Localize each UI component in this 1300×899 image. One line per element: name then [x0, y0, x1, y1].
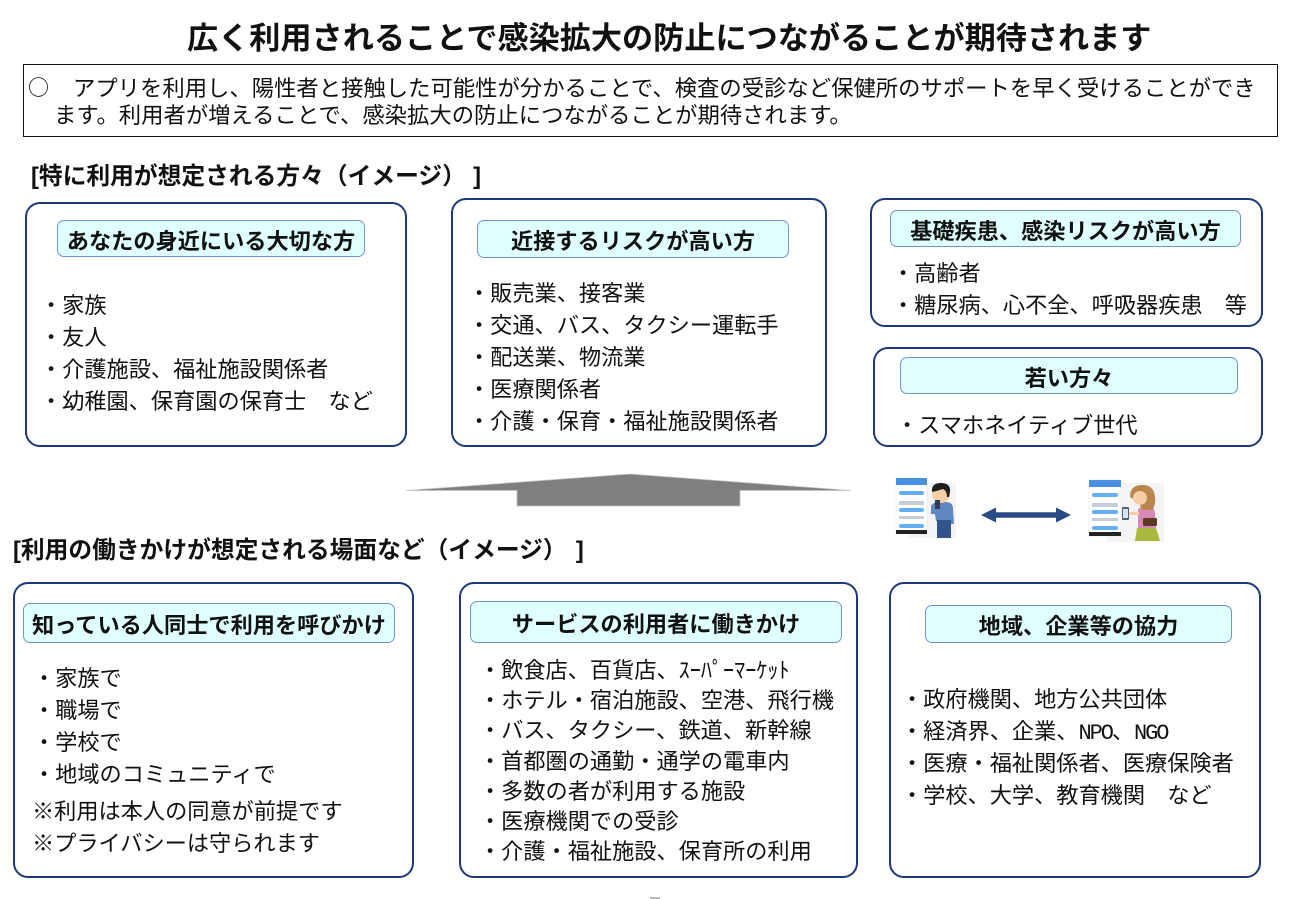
panel heading: 知っている人同士で利用を呼びかけ	[32, 613, 386, 638]
intro bullet: ○	[28, 72, 49, 102]
panel list: ・地域のコミュニティで	[33, 762, 276, 787]
panel heading: 近接するリスクが高い方	[511, 229, 755, 254]
panel list: ・高齢者	[892, 261, 981, 286]
panel list: ・ホテル・宿泊施設、空港、飛行機	[479, 688, 834, 713]
panel list: ・医療関係者	[468, 377, 601, 402]
panel list: ・販売業、接客業	[468, 281, 646, 306]
title: 広く利用されることで感染拡大の防止につながることが期待されます	[187, 21, 1151, 56]
panel list: ・医療・福祉関係者、医療保険者	[901, 751, 1234, 776]
panel: among acquaintances	[13, 582, 414, 878]
panel heading	[57, 220, 365, 257]
panel list: ・医療機関での受診	[479, 809, 679, 834]
panel notes	[32, 799, 343, 856]
panel heading	[477, 220, 789, 258]
arrow: upward wide arrow	[406, 474, 851, 506]
panel: young people	[873, 347, 1263, 447]
panel heading: 基礎疾患、感染リスクが高い方	[910, 218, 1221, 244]
panel list	[33, 666, 276, 787]
panel list: ・介護施設、福祉施設関係者	[40, 357, 328, 382]
icon: man with smartphone	[896, 478, 956, 538]
intro line 2: ます。利用者が増えることで、感染拡大の防止につながることが期待されます。	[54, 103, 852, 128]
panel notes: ※プライバシーは守られます	[32, 831, 320, 856]
panel list: ・介護・福祉施設、保育所の利用	[479, 839, 812, 864]
panel list: ・学校で	[33, 730, 122, 755]
panel list: ・首都圏の通勤・通学の電車内	[479, 749, 790, 774]
icon: double-headed arrow	[981, 508, 1071, 522]
panel notes: ※利用は本人の同意が前提です	[32, 799, 343, 824]
panel heading	[900, 357, 1238, 394]
section heading: expected users: [特に利用が想定される方々（イメージ） ]	[31, 163, 481, 190]
panel list: ・交通、バス、タクシー運転手	[468, 313, 779, 338]
panel list	[468, 281, 779, 434]
panel list	[901, 687, 1234, 808]
panel: community and corporate cooperation	[889, 582, 1261, 878]
section heading: situations: [利用の働きかけが想定される場面など（イメージ） ]	[13, 537, 584, 564]
panel list	[40, 293, 373, 414]
panel list: ・学校、大学、教育機関 など	[901, 783, 1212, 808]
icon: two users exchanging contact notification through the app	[896, 478, 1164, 542]
panel: people close to you	[25, 202, 407, 447]
intro text box	[23, 64, 1278, 137]
icon: woman with smartphone	[1089, 480, 1164, 542]
intro line 1: アプリを利用し、陽性者と接触した可能性が分かることで、検査の受診など保健所のサポートを早く受けることができ	[73, 76, 1256, 101]
panel heading: 若い方々	[1025, 366, 1113, 390]
panel heading: あなたの身近にいる大切な方	[67, 228, 355, 254]
panel heading	[470, 601, 842, 643]
panel: service users	[459, 582, 858, 878]
panel heading: サービスの利用者に働きかけ	[512, 612, 800, 637]
panel heading	[925, 605, 1232, 643]
panel heading	[890, 210, 1241, 247]
panel: underlying conditions	[870, 198, 1263, 327]
panel list: ・経済界、企業、NPO、NGO	[901, 719, 1167, 746]
panel list	[479, 658, 834, 864]
panel list	[892, 261, 1247, 318]
panel list: ・バス、タクシー、鉄道、新幹線	[479, 718, 812, 743]
panel list: ・家族で	[33, 666, 122, 691]
panel list: ・幼稚園、保育園の保育士 など	[40, 389, 373, 414]
panel list: ・介護・保育・福祉施設関係者	[468, 409, 779, 434]
panel list: ・配送業、物流業	[468, 345, 646, 370]
panel: high proximity risk	[451, 198, 827, 447]
panel list: ・家族	[40, 293, 107, 318]
panel list: ・多数の者が利用する施設	[479, 779, 745, 804]
panel list: ・飲食店、百貨店、ｽｰﾊﾟｰﾏｰｹｯﾄ	[479, 658, 790, 683]
panel list: ・スマホネイティブ世代	[896, 413, 1138, 438]
panel list: ・政府機関、地方公共団体	[901, 687, 1167, 712]
panel heading: 地域、企業等の協力	[979, 614, 1178, 639]
panel list: ・糖尿病、心不全、呼吸器疾患 等	[892, 293, 1247, 318]
page edge mark	[650, 897, 660, 899]
panel heading	[23, 603, 395, 643]
panel list: ・職場で	[33, 698, 122, 723]
panel list: ・友人	[40, 325, 107, 350]
